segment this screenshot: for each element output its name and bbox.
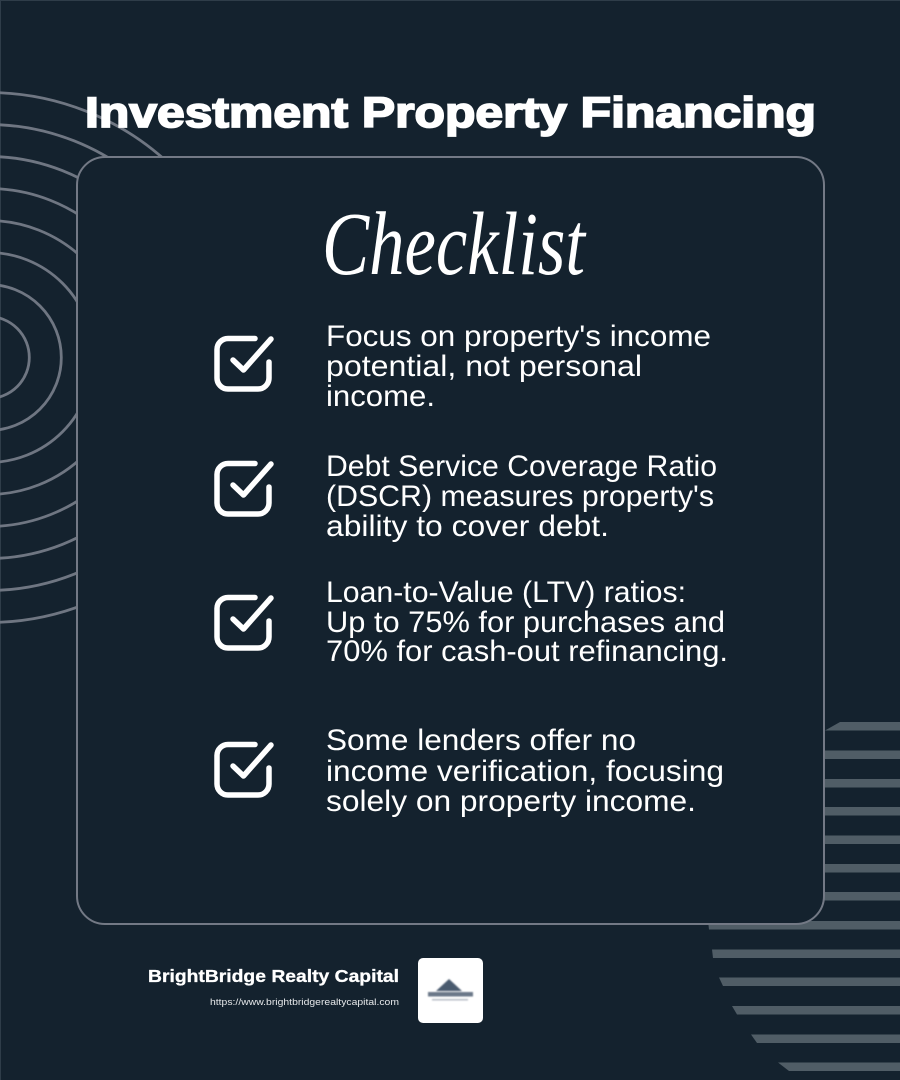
footer: logo [418, 958, 483, 1023]
checklist item 4 [217, 724, 724, 818]
title: Investment Property Financing [85, 89, 816, 137]
decoration: horizontal stripes [708, 722, 900, 1071]
text: item 2 [326, 450, 717, 543]
text: item 4: solely on property income. [326, 785, 696, 818]
panel: checklist card [77, 157, 824, 924]
text: item 3: Loan-to-Value (LTV) ratios: [326, 576, 686, 609]
icon: checkbox 4 [217, 744, 271, 795]
checklist item 2 [217, 450, 717, 543]
text: item 4: Some lenders offer no [326, 724, 636, 757]
text: item 2: ability to cover debt. [326, 510, 609, 543]
text: item 1: potential, not personal [326, 350, 642, 383]
decoration: concentric rings [0, 92, 253, 622]
text: item 3: 70% for cash-out refinancing. [326, 635, 728, 668]
text: item 1 [326, 320, 711, 413]
icon: checkbox 2 [217, 464, 271, 514]
icon: checkbox 3 [217, 598, 271, 648]
heading: Checklist: Checklist [322, 195, 587, 294]
icon: checkbox 1 [217, 338, 271, 389]
footer: website url: https://www.brightbridgerealtycapital.com [210, 997, 399, 1008]
checklist item 1 [217, 320, 711, 413]
text: item 4: income verification, focusing [326, 755, 724, 788]
text: item 4 [326, 724, 724, 818]
checklist item 3 [217, 576, 728, 668]
text: item 3: Up to 75% for purchases and [326, 606, 725, 639]
text: item 1: income. [326, 380, 435, 413]
text: item 2: (DSCR) measures property's [326, 480, 714, 513]
text: item 1: Focus on property's income [326, 320, 711, 353]
text: item 2: Debt Service Coverage Ratio [326, 450, 717, 483]
footer: company name: BrightBridge Realty Capital [148, 966, 399, 986]
text: item 3 [326, 576, 728, 668]
